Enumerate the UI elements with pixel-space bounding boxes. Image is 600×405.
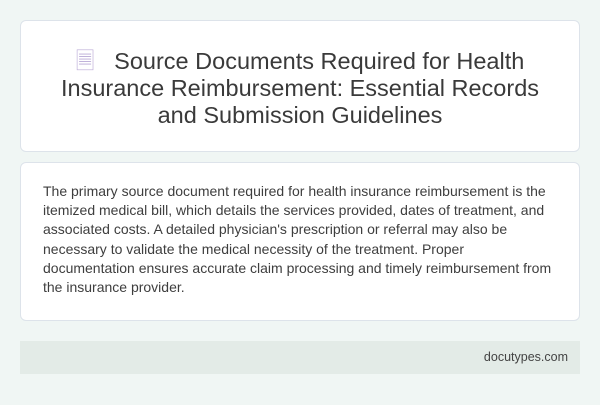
title card <box>20 20 580 152</box>
body card <box>20 162 580 321</box>
body text: The primary source document required for health insurance reimbursement is the itemized medical bill, which details the services provided, dates of treatment, and associated costs. A detailed physician's prescription or referral may also be necessary to validate the medical necessity of the treatment. Proper documentation ensures accurate claim processing and timely reimbursement from the insurance provider. <box>43 183 551 295</box>
footer <box>20 341 580 374</box>
title: 🗏 Source Documents Required for Health Insurance Reimbursement: Essential Records and Submission Guidelines <box>61 48 539 128</box>
footer: docutypes.com <box>484 350 568 364</box>
